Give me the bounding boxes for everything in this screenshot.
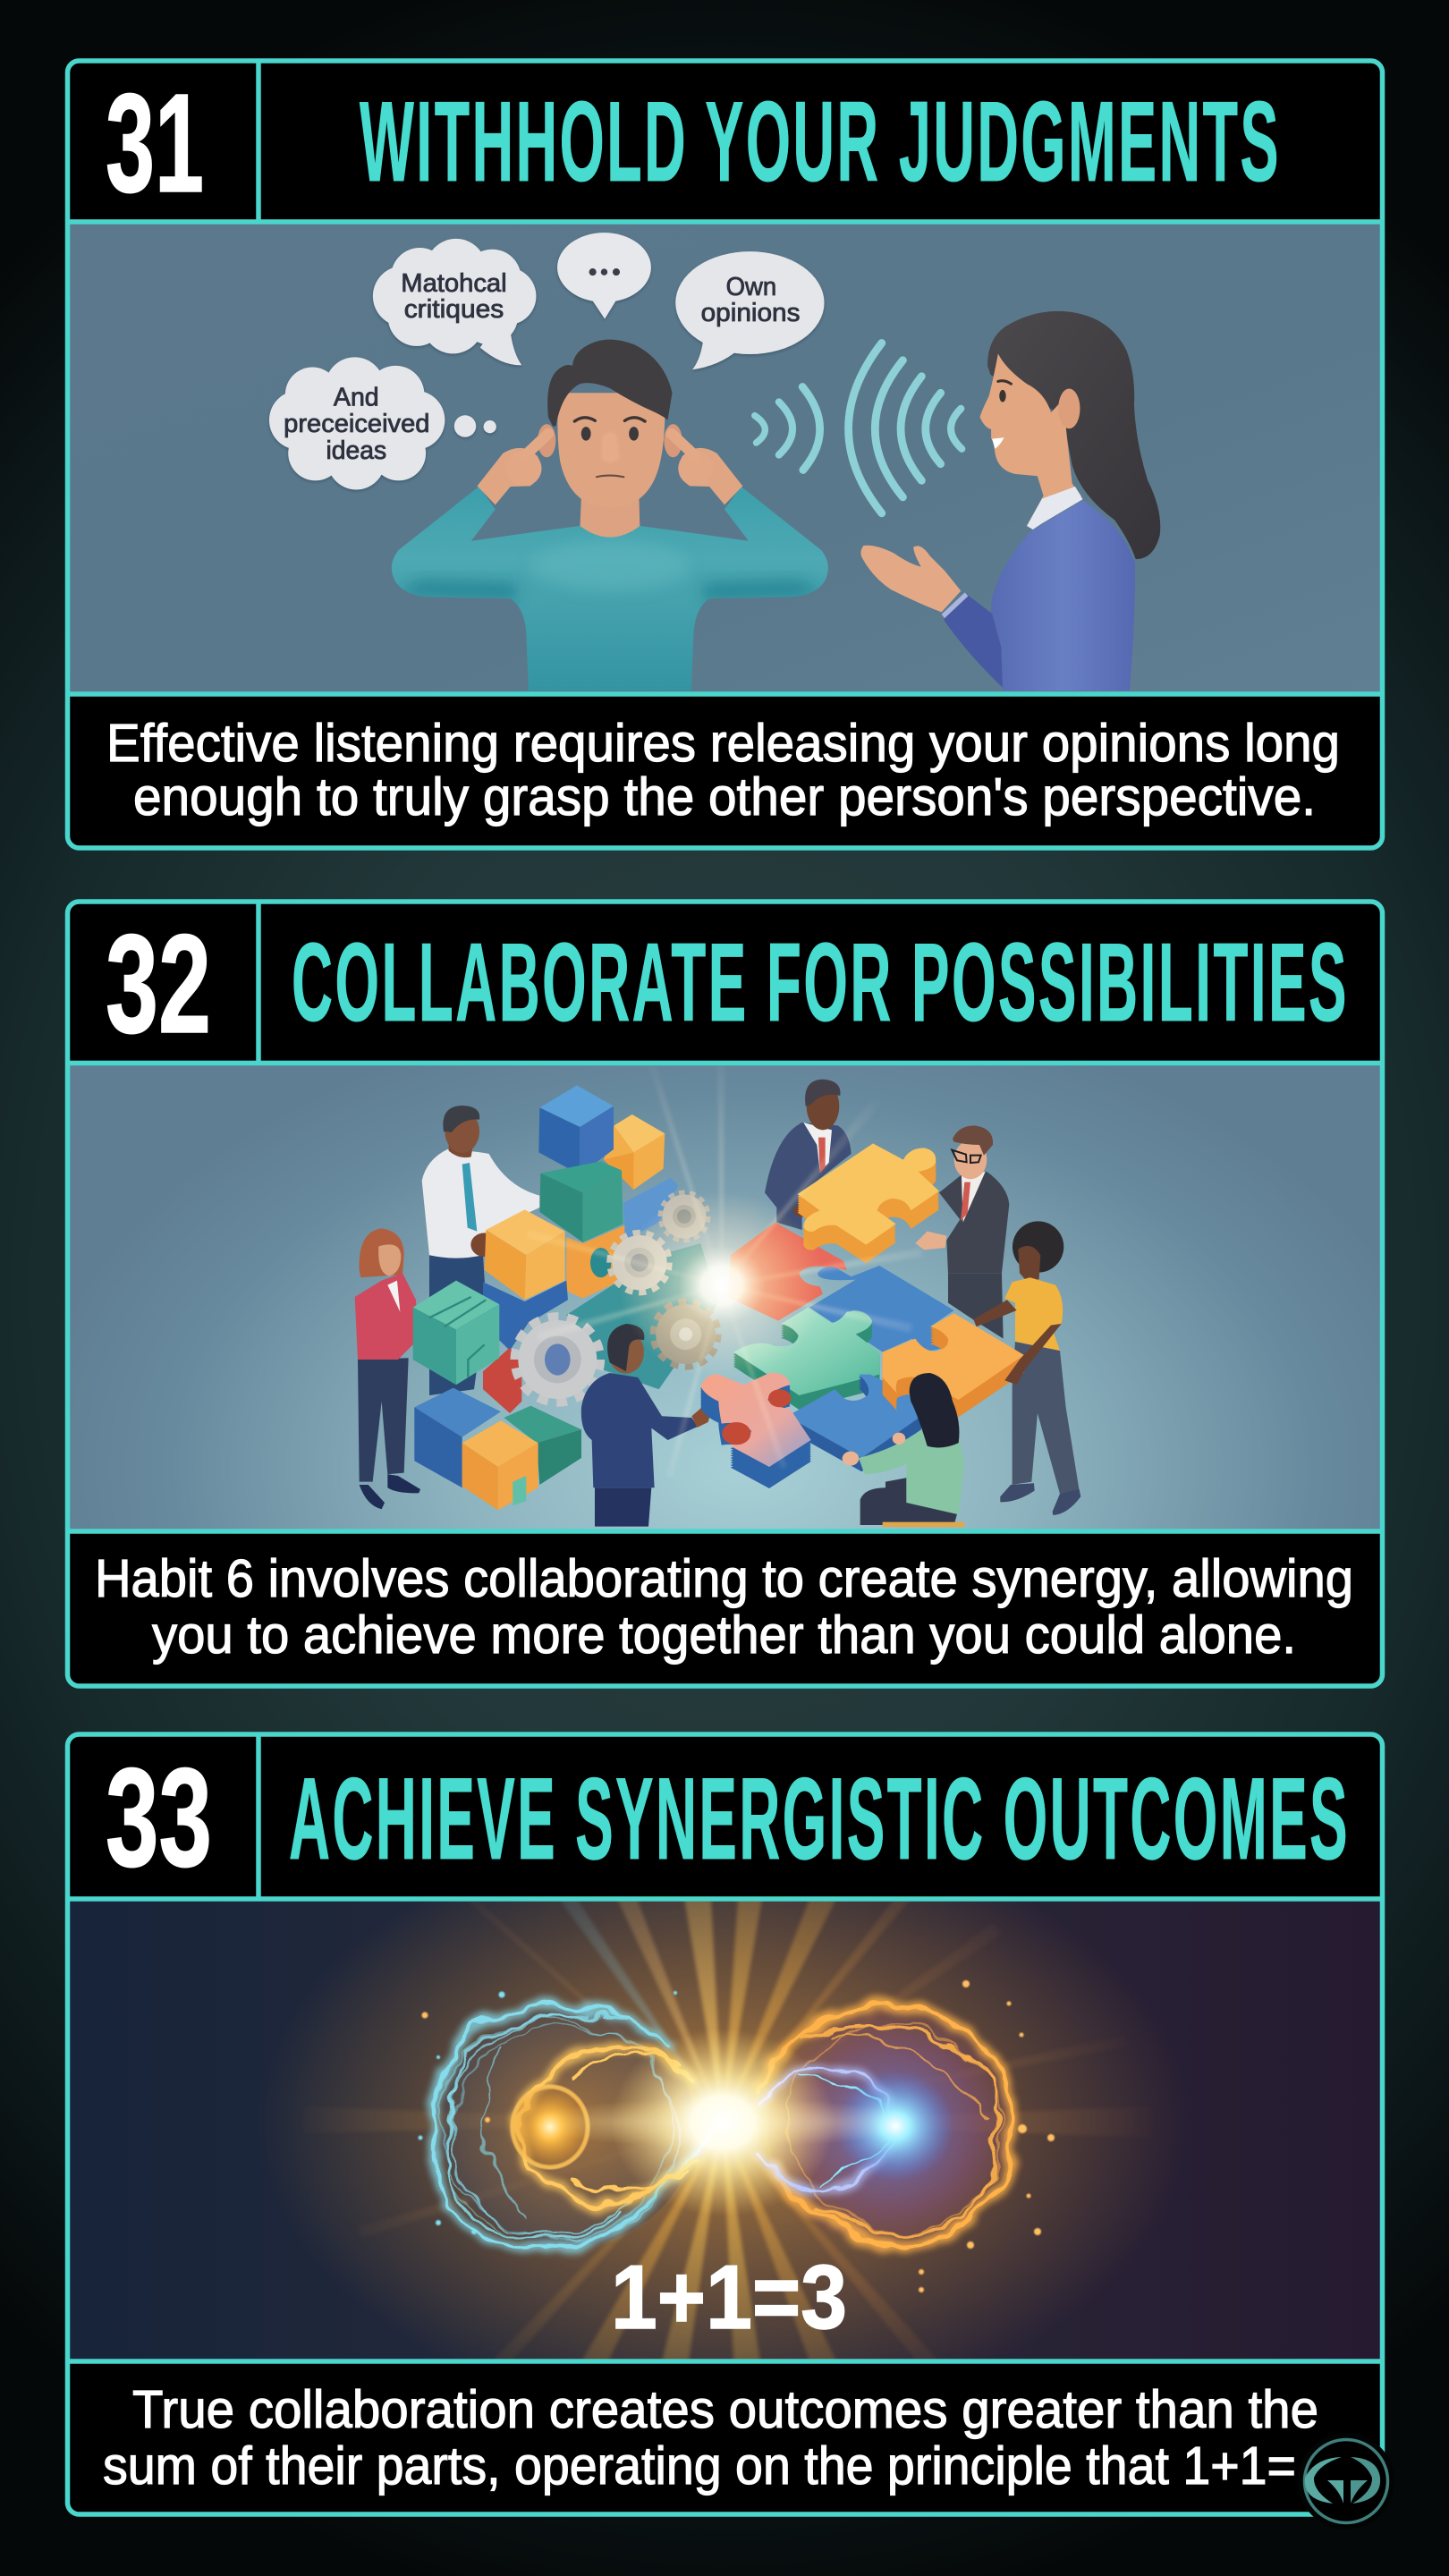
caption 32: Habit 6 involves collaborating to create synergy, allowing (95, 1549, 1353, 1608)
number 32: 32 (106, 906, 211, 1063)
puzzle pieces and right-hand people (700, 1080, 1080, 1527)
illustration: energy infinity symbol (70, 1902, 1380, 2360)
gears (516, 1193, 717, 1401)
man in navy suit, seen from behind (581, 1324, 713, 1527)
right core (836, 2071, 954, 2182)
blue and violet ring, right lobe (756, 2065, 894, 2192)
thought cloud: And preceiceived ideas (269, 357, 496, 489)
light rays (304, 1899, 1154, 2361)
speech bubble: ellipsis (557, 233, 651, 318)
caption 31 (106, 714, 1340, 826)
caption 33: True collaboration creates outcomes greater than the (132, 2380, 1318, 2439)
blue puzzle piece (809, 1266, 954, 1352)
speech bubble: Matohcal critiques (373, 239, 536, 365)
low blocks (414, 1388, 581, 1510)
man in suit behind yellow piece (765, 1080, 852, 1230)
infinity lobes (441, 2007, 1012, 2247)
teal puzzle cube (413, 1281, 499, 1385)
red puzzle piece (727, 1223, 847, 1321)
frame 33 (67, 1734, 1383, 2514)
man with glasses (915, 1125, 1009, 1339)
caption 32: you to achieve more together than you could alone. (152, 1606, 1296, 1665)
teal base under gears (566, 1243, 718, 1389)
number 31: 31 (106, 65, 204, 222)
standing man in white shirt (422, 1106, 539, 1395)
lower blue puzzle piece (787, 1375, 921, 1471)
green puzzle piece (733, 1308, 879, 1410)
speech bubble: Own opinions (675, 251, 825, 369)
orange puzzle piece (883, 1313, 1062, 1417)
stacked cubes (483, 1085, 678, 1413)
caption 32 (95, 1549, 1353, 1665)
number 33: 33 (106, 1740, 212, 1896)
sound waves (755, 343, 962, 513)
frame 32 (67, 902, 1383, 1686)
speech bubble: Matohcal critiques: Matohcal (401, 269, 507, 298)
speech bubble: Own opinions: Own (726, 273, 776, 301)
logo badge (1298, 2433, 1394, 2529)
panel 31: withhold your judgments (67, 61, 1383, 848)
orange ring, right lobe (750, 1986, 1038, 2272)
panel 33: achieve synergistic outcomes (67, 1734, 1383, 2514)
caption 31: Effective listening requires releasing your opinions long (106, 714, 1340, 773)
woman in red jacket holding puzzle cube (355, 1228, 437, 1509)
central burst (526, 2029, 919, 2216)
caption 33 (103, 2380, 1318, 2496)
equation 1+1=3: 1+1=3 (611, 2248, 847, 2348)
woman speaking (860, 311, 1160, 691)
illustration: man covering ears while woman speaks (70, 222, 1380, 694)
peach puzzle piece (700, 1373, 811, 1488)
central burst of light (526, 1065, 923, 1478)
woman in yellow top (973, 1221, 1080, 1515)
caption 33: sum of their parts, operating on the principle that 1+1= (103, 2436, 1296, 2496)
thought cloud: And preceiceived ideas: ideas (326, 436, 386, 465)
panel 32: collaborate for possibilities (67, 902, 1383, 1686)
speech bubble: Own opinions: opinions (701, 299, 800, 327)
man with fingers in ears (392, 340, 828, 691)
illustration: team building blocks and puzzle (70, 1063, 1380, 1531)
frame 31 (67, 61, 1383, 848)
seated woman in green top (843, 1373, 964, 1527)
sparks (419, 1980, 1055, 2292)
gold ring, left lobe (513, 2049, 698, 2202)
cyan ring, left lobe (404, 1980, 714, 2282)
yellow puzzle piece (798, 1143, 939, 1263)
left core (511, 2086, 589, 2168)
speech bubble: Matohcal critiques: critiques (404, 295, 504, 324)
caption 31: enough to truly grasp the other person's perspective. (133, 767, 1316, 826)
blocks, gears and left-hand people (355, 1085, 718, 1527)
scene artwork, first person (269, 233, 1160, 691)
thought cloud: And preceiceived ideas: preceiceived (284, 410, 429, 438)
thought cloud: And preceiceived ideas: And (334, 383, 379, 411)
